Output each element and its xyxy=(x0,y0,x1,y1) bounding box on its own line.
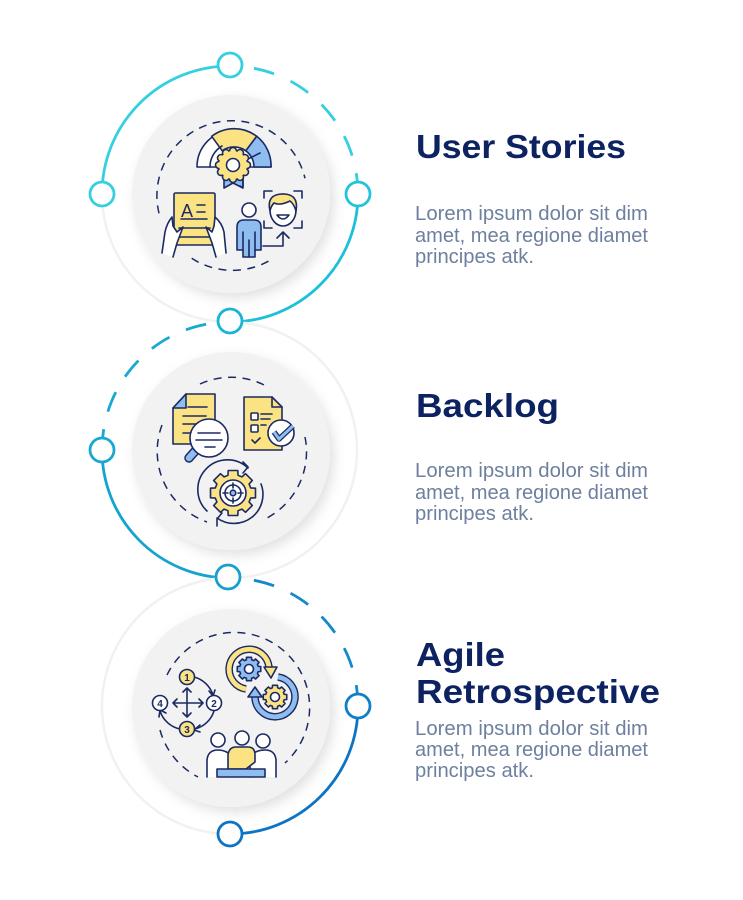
connector node: left xyxy=(90,438,114,462)
icon: gauge with award badge xyxy=(197,129,271,188)
icon: four step cycle: 2 xyxy=(211,699,217,710)
text block: step 2 description xyxy=(415,459,648,525)
connector node: shared top xyxy=(216,565,240,589)
icon: four step cycle xyxy=(152,670,222,736)
panel: step 1 user stories diagram xyxy=(90,53,370,322)
ring arc 3 xyxy=(230,578,358,834)
icon: two gears with cycle arrows xyxy=(229,649,295,717)
connector node: right xyxy=(346,182,370,206)
faint ring 2 xyxy=(228,322,357,578)
heading: Agile Retrospective xyxy=(416,636,660,710)
text block: step 1 description: principes atk. xyxy=(415,245,534,268)
base disc 3 xyxy=(132,609,330,807)
faint ring 1 xyxy=(102,194,230,322)
text block: step 3 description: principes atk. xyxy=(415,759,534,782)
heading: Agile Retrospective: Agile xyxy=(416,636,505,673)
connector node: top xyxy=(218,309,242,333)
heading: Backlog: Backlog xyxy=(416,387,559,424)
panel: step 3 agile retrospective diagram xyxy=(102,565,370,846)
ring arc 2 xyxy=(102,322,230,578)
dashed inner ring 2 xyxy=(157,377,307,522)
text block: step 2 description: amet, mea regione diamet xyxy=(415,481,648,504)
connector node: left xyxy=(90,182,114,206)
icon: hands holding document xyxy=(162,193,226,257)
text block: step 1 description: Lorem ipsum dolor sit dim xyxy=(415,202,648,225)
text block: step 1 description xyxy=(415,202,648,268)
ring arc 1 xyxy=(102,66,358,322)
base disc 1 xyxy=(132,95,330,293)
connector node: top xyxy=(218,53,242,77)
text block: step 3 description: amet, mea regione diamet xyxy=(415,738,648,761)
text block: step 3 description: Lorem ipsum dolor sit dim xyxy=(415,717,648,740)
faint ring 3 xyxy=(102,578,230,834)
icon: hands holding document: A xyxy=(181,201,193,221)
connector node: bottom xyxy=(218,822,242,846)
text block: step 3 description xyxy=(415,717,648,782)
icon: four step cycle: 1 xyxy=(184,673,190,684)
panel: step 2 backlog diagram xyxy=(90,309,357,578)
icon: person xyxy=(237,203,261,257)
text block: step 2 description: Lorem ipsum dolor sit dim xyxy=(415,459,648,482)
connector node: right xyxy=(346,694,370,718)
dashed inner ring 3 xyxy=(160,632,310,777)
base disc 2 xyxy=(132,352,330,550)
text block: step 2 description: principes atk. xyxy=(415,502,534,525)
icon: face recognition with arrow xyxy=(263,191,302,246)
heading: Agile Retrospective: Retrospective xyxy=(416,673,660,710)
icon: checklist with check badge xyxy=(244,397,294,450)
text block: step 1 description: amet, mea regione diamet xyxy=(415,224,648,247)
icon: four step cycle: 3 xyxy=(184,725,190,736)
icon: document with magnifier xyxy=(173,394,228,458)
icon: target gear with cycle arrows xyxy=(198,460,263,526)
dashed inner ring 1 xyxy=(157,121,305,270)
icon: four step cycle: 4 xyxy=(157,699,163,710)
heading: User Stories: User Stories xyxy=(416,128,626,165)
icon: team at table xyxy=(207,731,276,777)
